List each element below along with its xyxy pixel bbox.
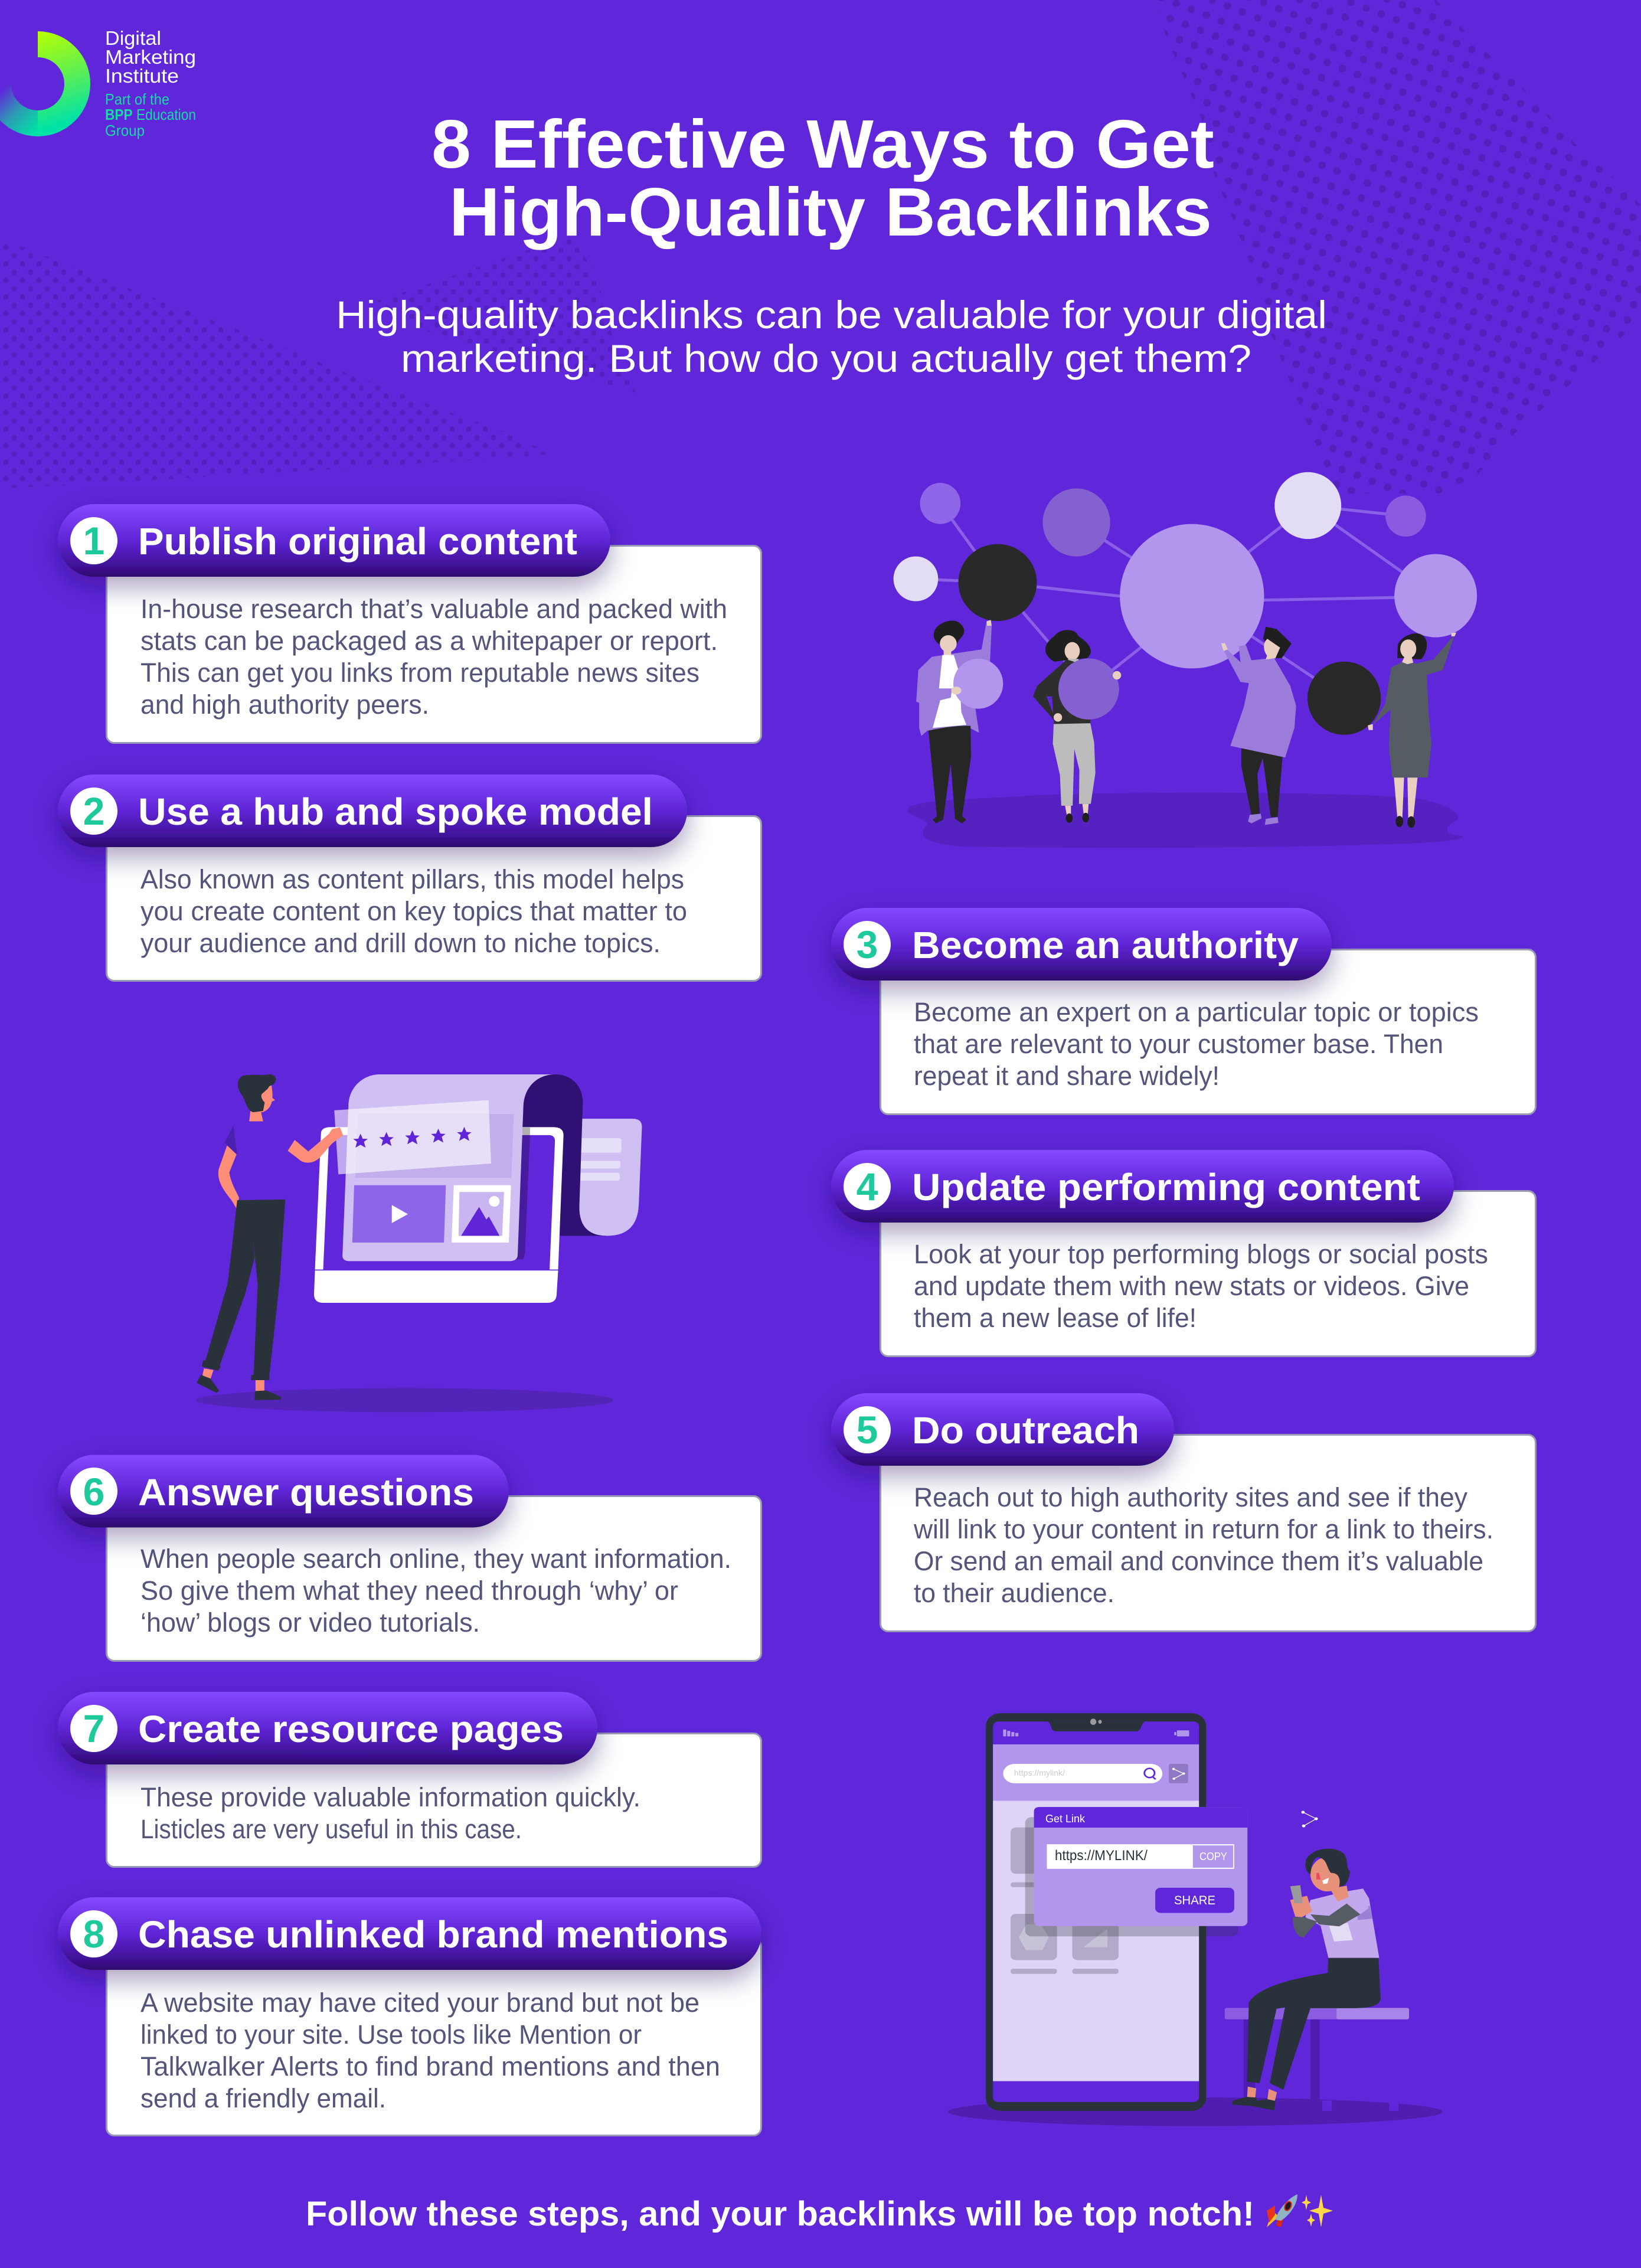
step 3 body text [914,997,1479,1091]
step 6 body text: When people search online, they want information. [140,1544,731,1574]
logo: BPP Education [105,106,196,123]
dialog [1025,1817,1238,1936]
step 4 heading pill: 4 [857,1165,878,1208]
footer line: Follow these steps, and your backlinks will be top notch! [306,2195,1254,2233]
step 1 heading pill: 1 [83,519,104,563]
step 1 body text [140,594,727,720]
step 2 heading pill: 2 [83,789,104,833]
phone UI labels: COPY [1199,1851,1227,1862]
step 6 heading pill [58,1455,509,1528]
seated person [1233,1849,1381,2110]
scroll dark fold [522,1074,607,1236]
step 1 heading pill [58,504,610,577]
step 6 body text [140,1544,731,1638]
panel: step 8 [58,1897,761,2136]
step 8 heading pill: Chase unlinked brand mentions [138,1913,728,1956]
phone UI labels: https://MYLINK/ [1055,1848,1148,1864]
rating card [334,1100,491,1174]
step 4 body text: Look at your top performing blogs or social posts [914,1239,1488,1269]
illustration: people holding network nodes [894,472,1477,848]
step 3 heading pill: Become an authority [912,924,1299,966]
panel: step 3 [831,908,1536,1115]
step 8 body text [140,1988,720,2113]
phone [986,1713,1206,2111]
step 5 body text: will link to your content in return for a link to theirs. [913,1514,1493,1544]
step 7 heading pill: Create resource pages [138,1708,564,1750]
dotted blob: left [0,239,557,489]
panel: step 4 [831,1150,1536,1357]
step 1 body text: This can get you links from reputable news sites [140,658,699,688]
step 2 body text: you create content on key topics that matter to [140,896,687,926]
title: 8 Effective Ways to Get [432,106,1214,182]
share icon floating [1302,1811,1318,1828]
phone UI labels: https://mylink/ [1014,1768,1065,1777]
step 2 heading pill: Use a hub and spoke model [138,790,653,833]
step 1 body text: In-house research that’s valuable and packed with [140,594,727,624]
step 7 body text: These provide valuable information quickly. [140,1782,640,1812]
illustration: person with content scroll and laptop [196,1074,642,1412]
step 2 body text: your audience and drill down to niche topics. [140,928,661,958]
title: High-Quality Backlinks [449,174,1212,250]
step 8 body text: linked to your site. Use tools like Mention or [140,2019,642,2050]
step 5 body text: to their audience. [914,1578,1114,1608]
step 2 body text [140,864,687,958]
logo: Part of the [105,90,169,108]
title [432,106,1214,250]
step 4 body text: and update them with new stats or videos. Give [914,1271,1469,1301]
step 6 body text: ‘how’ blogs or video tutorials. [140,1607,480,1638]
logo: Group [105,122,145,139]
dotted blob: top right [1155,0,1641,494]
person 3 [1221,627,1381,825]
step 3 body text: Become an expert on a particular topic or topics [914,997,1479,1027]
panel: step 7 [58,1692,761,1867]
ground shadow [948,2097,1443,2126]
step 3 heading pill: 3 [857,923,878,966]
icon: rocket [1267,2194,1297,2227]
bench [1244,2019,1255,2111]
subtitle: marketing. But how do you actually get them? [401,336,1251,380]
step 3 heading pill [831,908,1332,981]
step 8 body text: Talkwalker Alerts to find brand mentions and then [140,2051,720,2081]
step 1 heading pill: Publish original content [138,520,577,563]
person 4 [1368,633,1456,828]
step 5 heading pill: Do outreach [912,1409,1139,1452]
step 7 heading pill: 7 [83,1707,104,1750]
logo: Digital [105,27,161,49]
step 4 body text [914,1239,1488,1333]
step 2 body text: Also known as content pillars, this model helps [140,864,684,894]
person [197,1074,343,1400]
step 5 body text: Or send an email and convince them it’s valuable [914,1546,1483,1576]
illustration: phone with share-link dialog and seated person [948,1713,1443,2126]
ground shadow [196,1388,613,1412]
step 5 body text [913,1482,1493,1608]
panel: step 5 [831,1393,1536,1632]
step 7 body text: Listicles are very useful in this case. [140,1814,522,1844]
step 5 heading pill: 5 [857,1408,878,1452]
logo: Institute [105,65,179,87]
step 2 heading pill [58,774,687,847]
step 6 body text: So give them what they need through ‘why’ or [140,1576,678,1606]
subtitle [336,293,1327,380]
panel: step 2 [58,774,761,981]
step 1 body text: stats can be packaged as a whitepaper or report. [140,626,718,656]
step 8 heading pill: 8 [83,1912,104,1956]
step 8 heading pill [58,1897,761,1970]
step 5 heading pill [831,1393,1174,1466]
app tiles [1011,1828,1057,1874]
step 3 body text: repeat it and share widely! [914,1061,1220,1091]
subtitle: High-quality backlinks can be valuable for your digital [336,293,1327,336]
back paper [578,1119,642,1236]
step 7 body text [140,1782,640,1844]
scroll page [342,1074,555,1261]
step 3 body text: that are relevant to your customer base. Then [914,1029,1443,1059]
step 4 heading pill [831,1150,1454,1223]
phone UI labels: Get Link [1045,1813,1086,1825]
step 4 body text: them a new lease of life! [914,1303,1197,1333]
person 1 [916,620,1003,823]
step 8 body text: A website may have cited your brand but not be [140,1988,699,2018]
phone UI labels: SHARE [1174,1894,1215,1907]
laptop [315,1127,564,1270]
step 6 heading pill: 6 [83,1470,104,1514]
phone UI labels [1014,1768,1227,1907]
dotted blob: behind subtitle [377,235,636,393]
person 2 [1033,630,1121,823]
step 8 body text: send a friendly email. [140,2083,386,2113]
icon: sparkles [1302,2195,1333,2227]
panel: step 1 [58,504,761,743]
panel: step 6 [58,1455,761,1661]
logo: Marketing [105,46,196,68]
step 1 body text: and high authority peers. [140,689,429,720]
step 6 heading pill: Answer questions [138,1471,474,1514]
logo [0,27,196,139]
step 7 heading pill [58,1692,597,1764]
step 4 heading pill: Update performing content [912,1166,1420,1208]
step 5 body text: Reach out to high authority sites and see if they [914,1482,1467,1512]
